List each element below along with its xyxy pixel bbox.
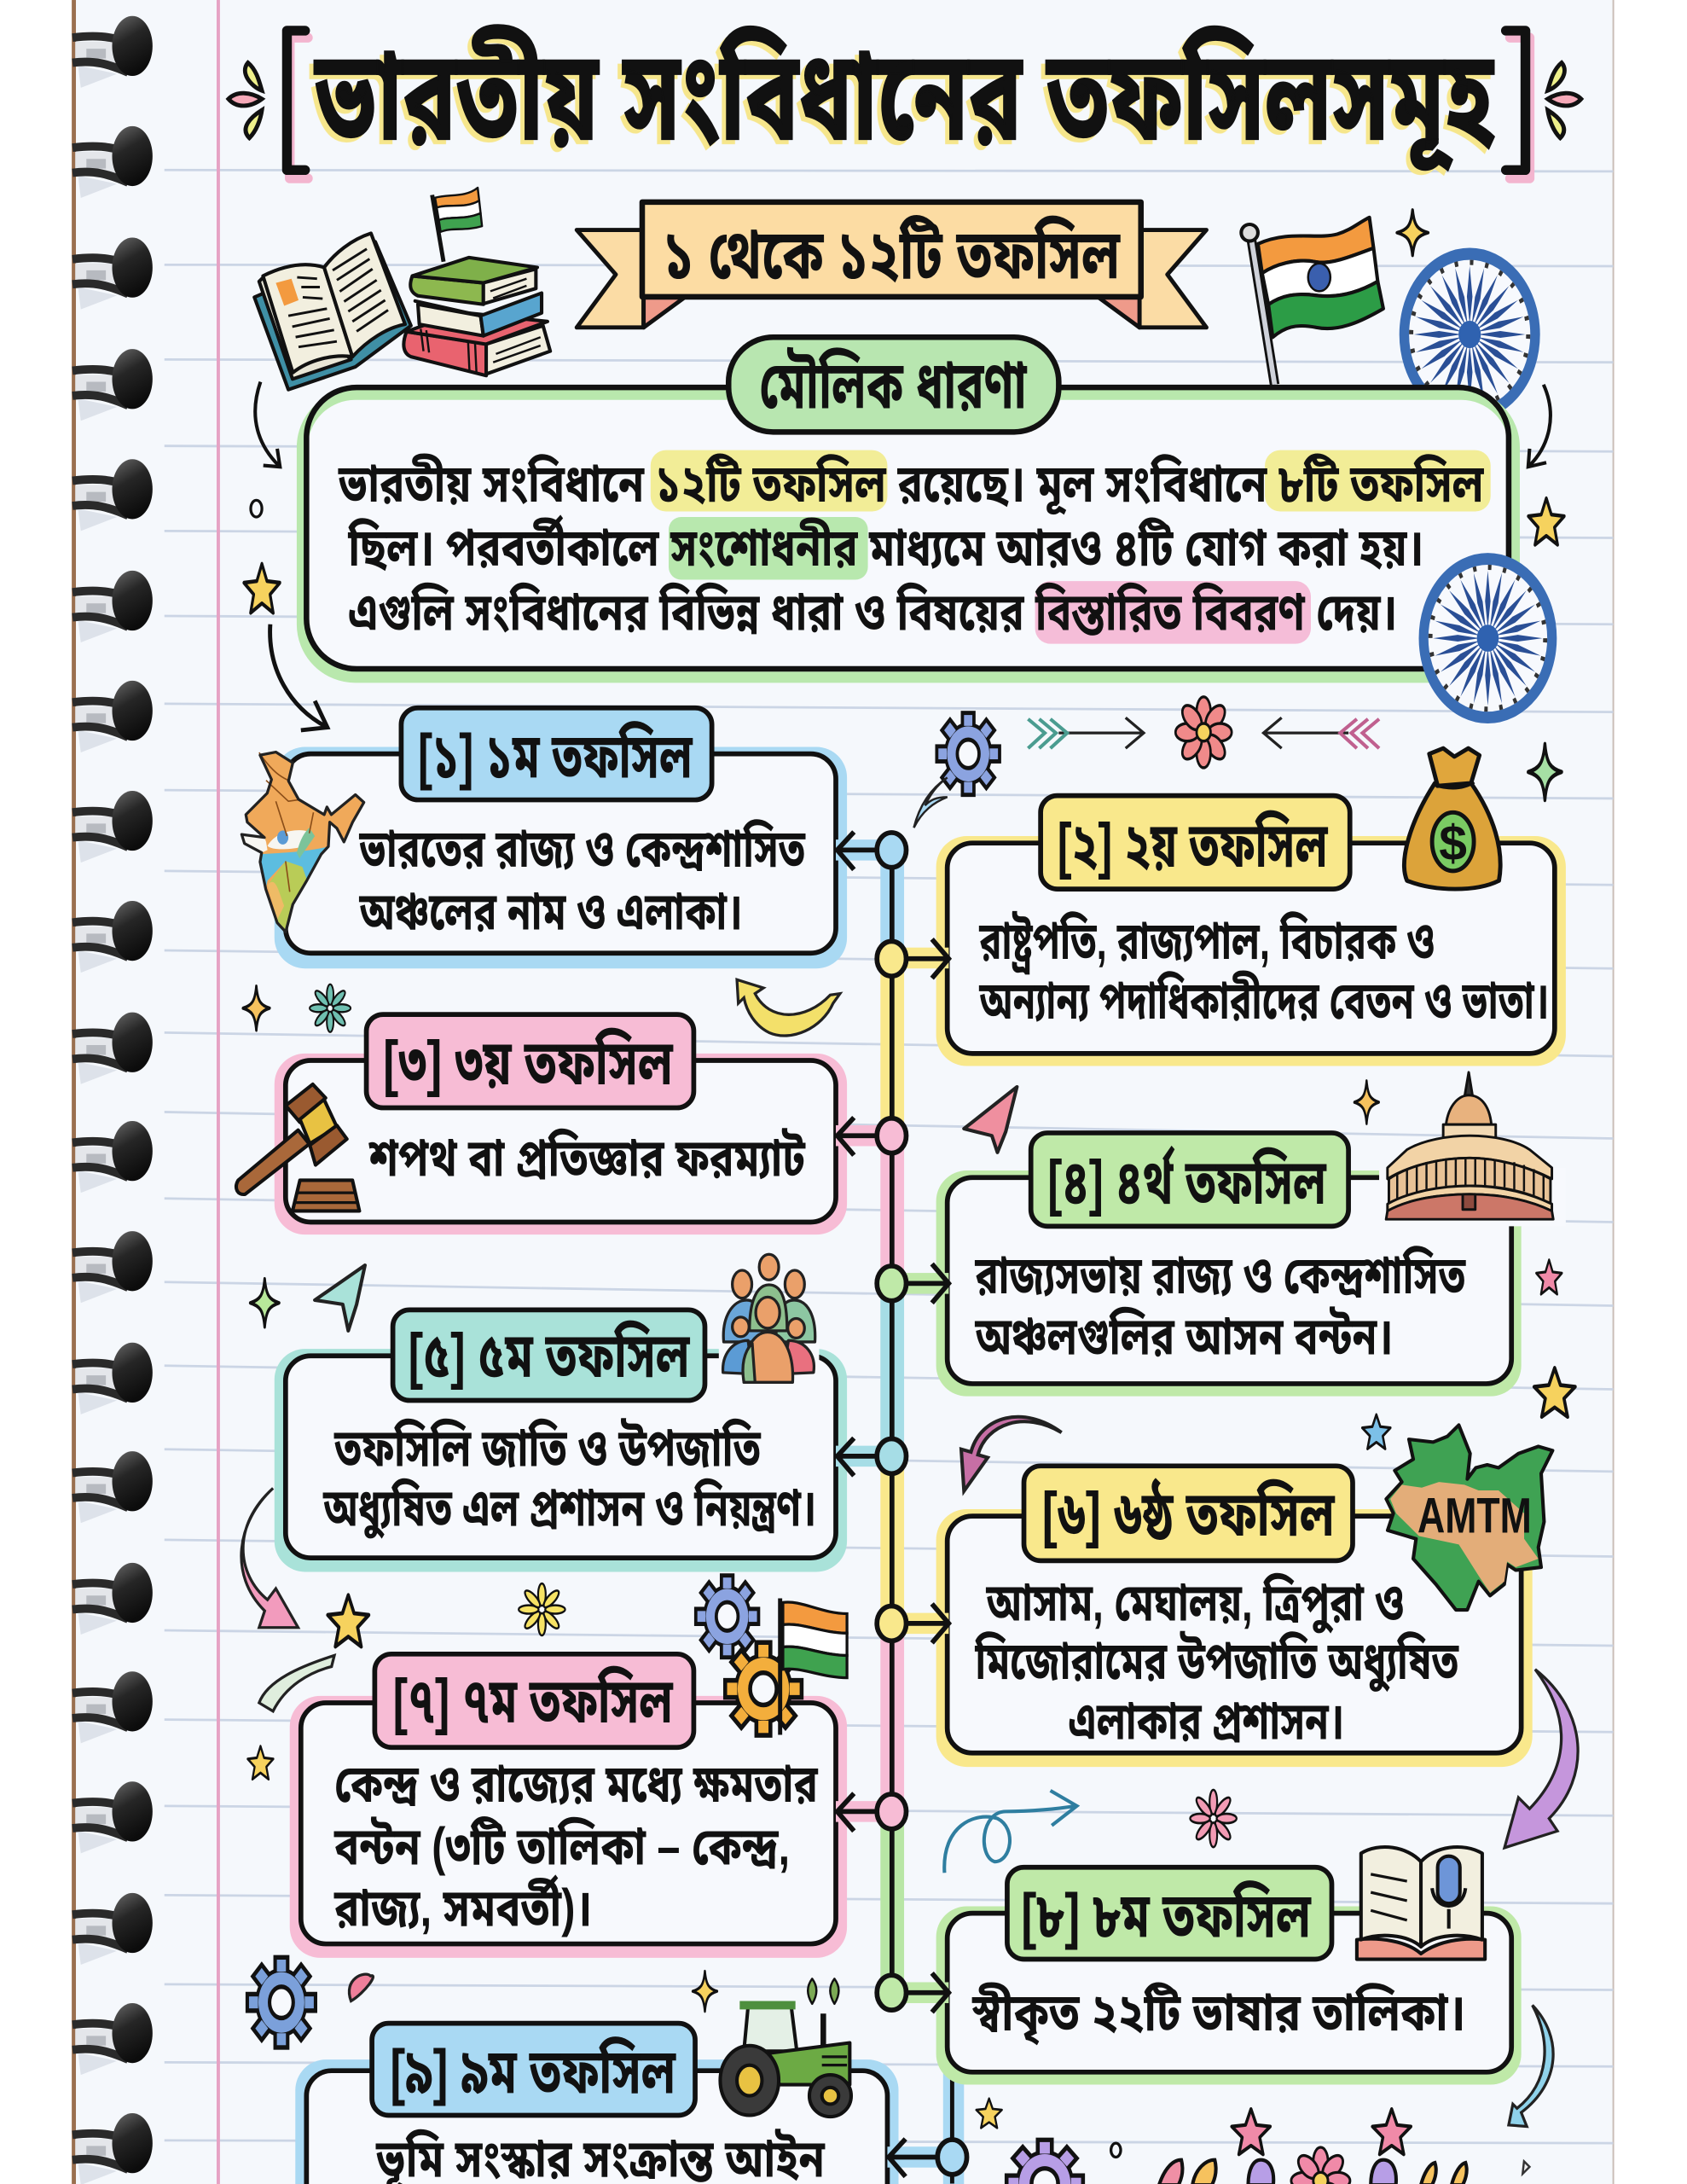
schedule 6 header	[1024, 1466, 1353, 1560]
icon: books with flag	[254, 188, 550, 390]
schedule 8 header	[1007, 1867, 1331, 1960]
schedule 7 header	[374, 1654, 693, 1747]
schedule 2 header: [২] ২য় তফসিল	[1058, 809, 1329, 880]
icon: burst teal	[310, 985, 351, 1032]
highlights	[651, 450, 1491, 644]
sparkle	[1528, 744, 1562, 800]
icon: flower	[1175, 697, 1232, 768]
small circle	[251, 500, 262, 517]
icon: burst pink	[1190, 1790, 1237, 1847]
schedule 7 card	[290, 1654, 847, 1958]
schedule 9 header: [৯] ৯ম তফসিল	[390, 2035, 676, 2106]
banner ribbon	[577, 202, 1206, 328]
schedule 7 header: [৭] ৭ম তফসিল	[393, 1664, 674, 1736]
star	[328, 1595, 368, 1647]
star blue	[1362, 1414, 1390, 1449]
banner text: ১ থেকে ১২টি তফসিল	[663, 215, 1121, 294]
title flourish right	[1548, 63, 1581, 138]
schedule 5 text	[322, 1418, 816, 1540]
book stack	[403, 258, 550, 375]
schedule 3 card	[275, 1014, 847, 1234]
schedule 5 text: তফসিলি জাতি ও উপজাতি	[333, 1418, 762, 1478]
star small	[247, 1746, 273, 1780]
star	[244, 564, 280, 613]
schedule 4 header: [৪] ৪র্থ তফসিল	[1047, 1145, 1327, 1217]
schedule 6 text: আসাম, মেঘালয়, ত্রিপুরা ও	[986, 1573, 1404, 1635]
schedule 9 header	[372, 2024, 695, 2115]
timeline arrows	[836, 832, 948, 2176]
arrow: right concept	[1528, 385, 1551, 467]
icon: gear blue large	[247, 1957, 316, 2048]
icon: burst yellow	[519, 1583, 565, 1635]
timeline	[880, 850, 904, 1993]
arrow: teal	[1028, 717, 1144, 748]
title flourish left	[229, 63, 262, 138]
schedule 3 header	[367, 1014, 693, 1108]
schedule 6 text	[975, 1573, 1459, 1751]
icon: book with microphone	[1357, 1847, 1485, 1960]
star yellow	[1534, 1368, 1575, 1417]
schedule 6 text: মিজোরামের উপজাতি অধ্যুষিত	[975, 1631, 1459, 1693]
icon: gavel	[236, 1084, 359, 1211]
arrow: to first schedule	[270, 624, 328, 730]
schedule 7 text	[333, 1755, 818, 1937]
schedule 1 text: অঞ্চলের নাম ও এলাকা।	[359, 882, 743, 941]
icon: gears and flag	[696, 1576, 847, 1735]
title brackets	[287, 31, 1529, 178]
heading pill: basic concept	[728, 337, 1058, 432]
icon: flag	[1241, 218, 1383, 385]
icon: parliament	[1379, 1072, 1566, 1226]
schedule 5 text: অধ্যুষিত এল প্রশাসন ও নিয়ন্ত্রণ।	[322, 1478, 816, 1540]
icon: gear blue	[936, 713, 1000, 795]
icon: gear purple	[1006, 2140, 1083, 2184]
schedule 4 text: রাজ্যসভায় রাজ্য ও কেন্দ্রশাসিত	[975, 1246, 1466, 1305]
concept body text	[338, 454, 1484, 642]
arrow: gear	[913, 777, 948, 828]
small mark	[1522, 2161, 1529, 2174]
schedule 4 card	[936, 1133, 1522, 1397]
schedule 1 header: [১] ১ম তফসিল	[418, 719, 693, 791]
icon: money bag: $	[1439, 816, 1467, 871]
map label: AMTM	[1417, 1489, 1532, 1544]
schedule 7 text: রাজ্য, সমবর্তী)।	[333, 1874, 592, 1937]
small flag	[432, 188, 482, 262]
schedule 3 text: শপথ বা প্রতিজ্ঞার ফরম্যাট	[368, 1129, 806, 1188]
sparkle	[693, 1972, 717, 2012]
sparkle	[243, 986, 270, 1031]
concept body text: এগুলি সংবিধানের বিভিন্ন ধারা ও বিষয়ের বিস্তারিত বিবরণ দেয়।	[348, 582, 1397, 642]
icon: scroll	[259, 1655, 334, 1711]
icon: india map	[241, 752, 364, 932]
star small bottom	[977, 2099, 1002, 2128]
schedule 1 text: ভারতের রাজ্য ও কেন্দ্রশাসিত	[359, 819, 806, 879]
icon: people	[719, 1254, 819, 1388]
arrow: pink curved	[241, 1488, 299, 1628]
sparkle	[1397, 210, 1429, 255]
flowers row bottom	[1159, 2147, 1467, 2184]
icon: money bag	[1404, 748, 1500, 889]
schedule 9 card	[295, 2024, 899, 2184]
icon: paper plane pink	[964, 1087, 1017, 1153]
icon: curved arrow purple	[961, 1417, 1062, 1491]
schedule 4 text: অঞ্চলগুলির আসন বন্টন।	[975, 1307, 1393, 1367]
heading pill: basic concept: মৌলিক ধারণা	[759, 347, 1027, 423]
star pink	[1232, 2109, 1270, 2154]
schedule 4 text	[975, 1246, 1466, 1367]
panel: basic concept	[302, 387, 1514, 677]
icon: heart	[349, 1974, 373, 2001]
arrow: left concept	[255, 382, 280, 467]
schedule 5 header: [৫] ৫ম তফসিল	[409, 1319, 690, 1391]
arrow: purple long	[1504, 1670, 1578, 1848]
icon: paper plane teal	[315, 1265, 365, 1331]
open book	[254, 233, 411, 390]
sparkle	[250, 1279, 279, 1327]
timeline nodes	[877, 833, 967, 2175]
schedule 1 text	[359, 819, 806, 941]
star pink	[1536, 1260, 1562, 1294]
timeline connector bottom	[943, 2062, 964, 2184]
arrow: yellow curve	[737, 979, 840, 1036]
arrow: pink	[1263, 717, 1379, 748]
schedule 8 header: [৮] ৮ম তফসিল	[1021, 1879, 1312, 1950]
icon: AMTM map	[1386, 1425, 1552, 1610]
schedule 1 card	[275, 708, 847, 968]
schedule 6 header: [৬] ৬ষ্ঠ তফসিল	[1042, 1477, 1336, 1549]
schedule 8 card	[936, 1867, 1522, 2085]
schedule 5 header	[393, 1310, 704, 1401]
arrow: small blue	[1509, 2005, 1553, 2127]
schedule 3 header: [৩] ৩য় তফসিল	[383, 1026, 674, 1098]
schedule 2 text: রাষ্ট্রপতি, রাজ্যপাল, বিচারক ও	[979, 911, 1435, 974]
schedule 2 header	[1041, 796, 1350, 889]
schedule 6 card	[936, 1466, 1533, 1767]
small circle	[1111, 2143, 1121, 2157]
icon: tractor	[720, 1978, 851, 2117]
schedule 8 text: স্বীকৃত ২২টি ভাষার তালিকা।	[971, 1983, 1465, 2046]
star	[1528, 498, 1564, 545]
schedule 7 text: বন্টন (৩টি তালিকা – কেন্দ্র,	[333, 1816, 790, 1876]
schedule 4 header	[1031, 1133, 1348, 1226]
icon: ashoka wheel lower	[1423, 559, 1552, 717]
arrow: blue loop	[944, 1791, 1077, 1873]
spiral binding	[72, 16, 153, 2184]
icon: ashoka wheel top	[1404, 254, 1535, 415]
schedule 7 text: কেন্দ্র ও রাজ্যের মধ্যে ক্ষমতার	[334, 1755, 818, 1814]
schedule 2 text	[979, 911, 1549, 1031]
schedule 5 card	[275, 1310, 847, 1571]
sparkle	[1354, 1081, 1379, 1124]
schedule 2 card	[936, 796, 1566, 1066]
schedule 6 text: এলাকার প্রশাসন।	[1069, 1692, 1344, 1751]
star pink	[1372, 2109, 1411, 2154]
schedule 1 header	[401, 708, 712, 800]
